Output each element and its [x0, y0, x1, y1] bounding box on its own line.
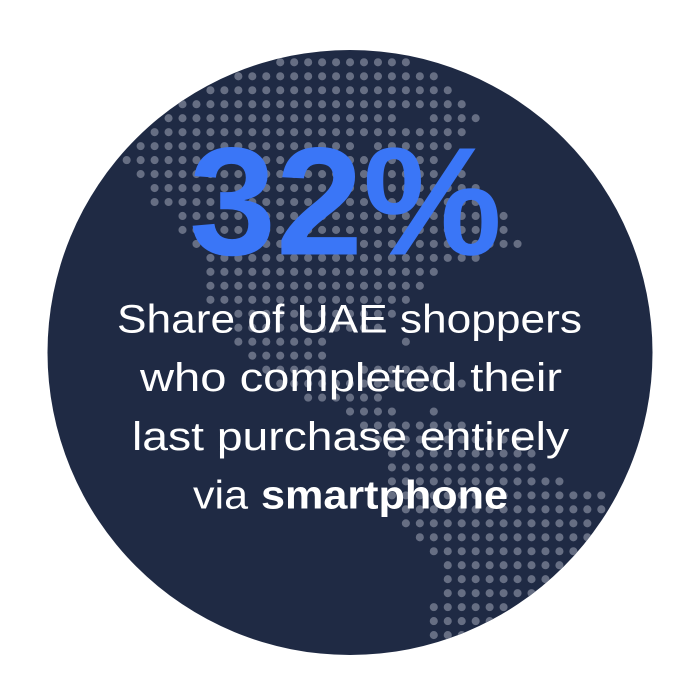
- line 3: last purchase entirely: [132, 415, 569, 459]
- line 4: smartphone: smartphone: [261, 474, 508, 518]
- line 2: who completed their: [139, 356, 562, 400]
- dotted world map: [127, 62, 603, 635]
- line 1: Share of UAE shoppers: [117, 298, 582, 342]
- heading: 32%: 32%: [189, 116, 502, 288]
- panel: navy circle: [48, 50, 652, 655]
- line 4: via: via: [193, 474, 249, 518]
- infographic: [48, 50, 652, 655]
- description text: [117, 298, 582, 518]
